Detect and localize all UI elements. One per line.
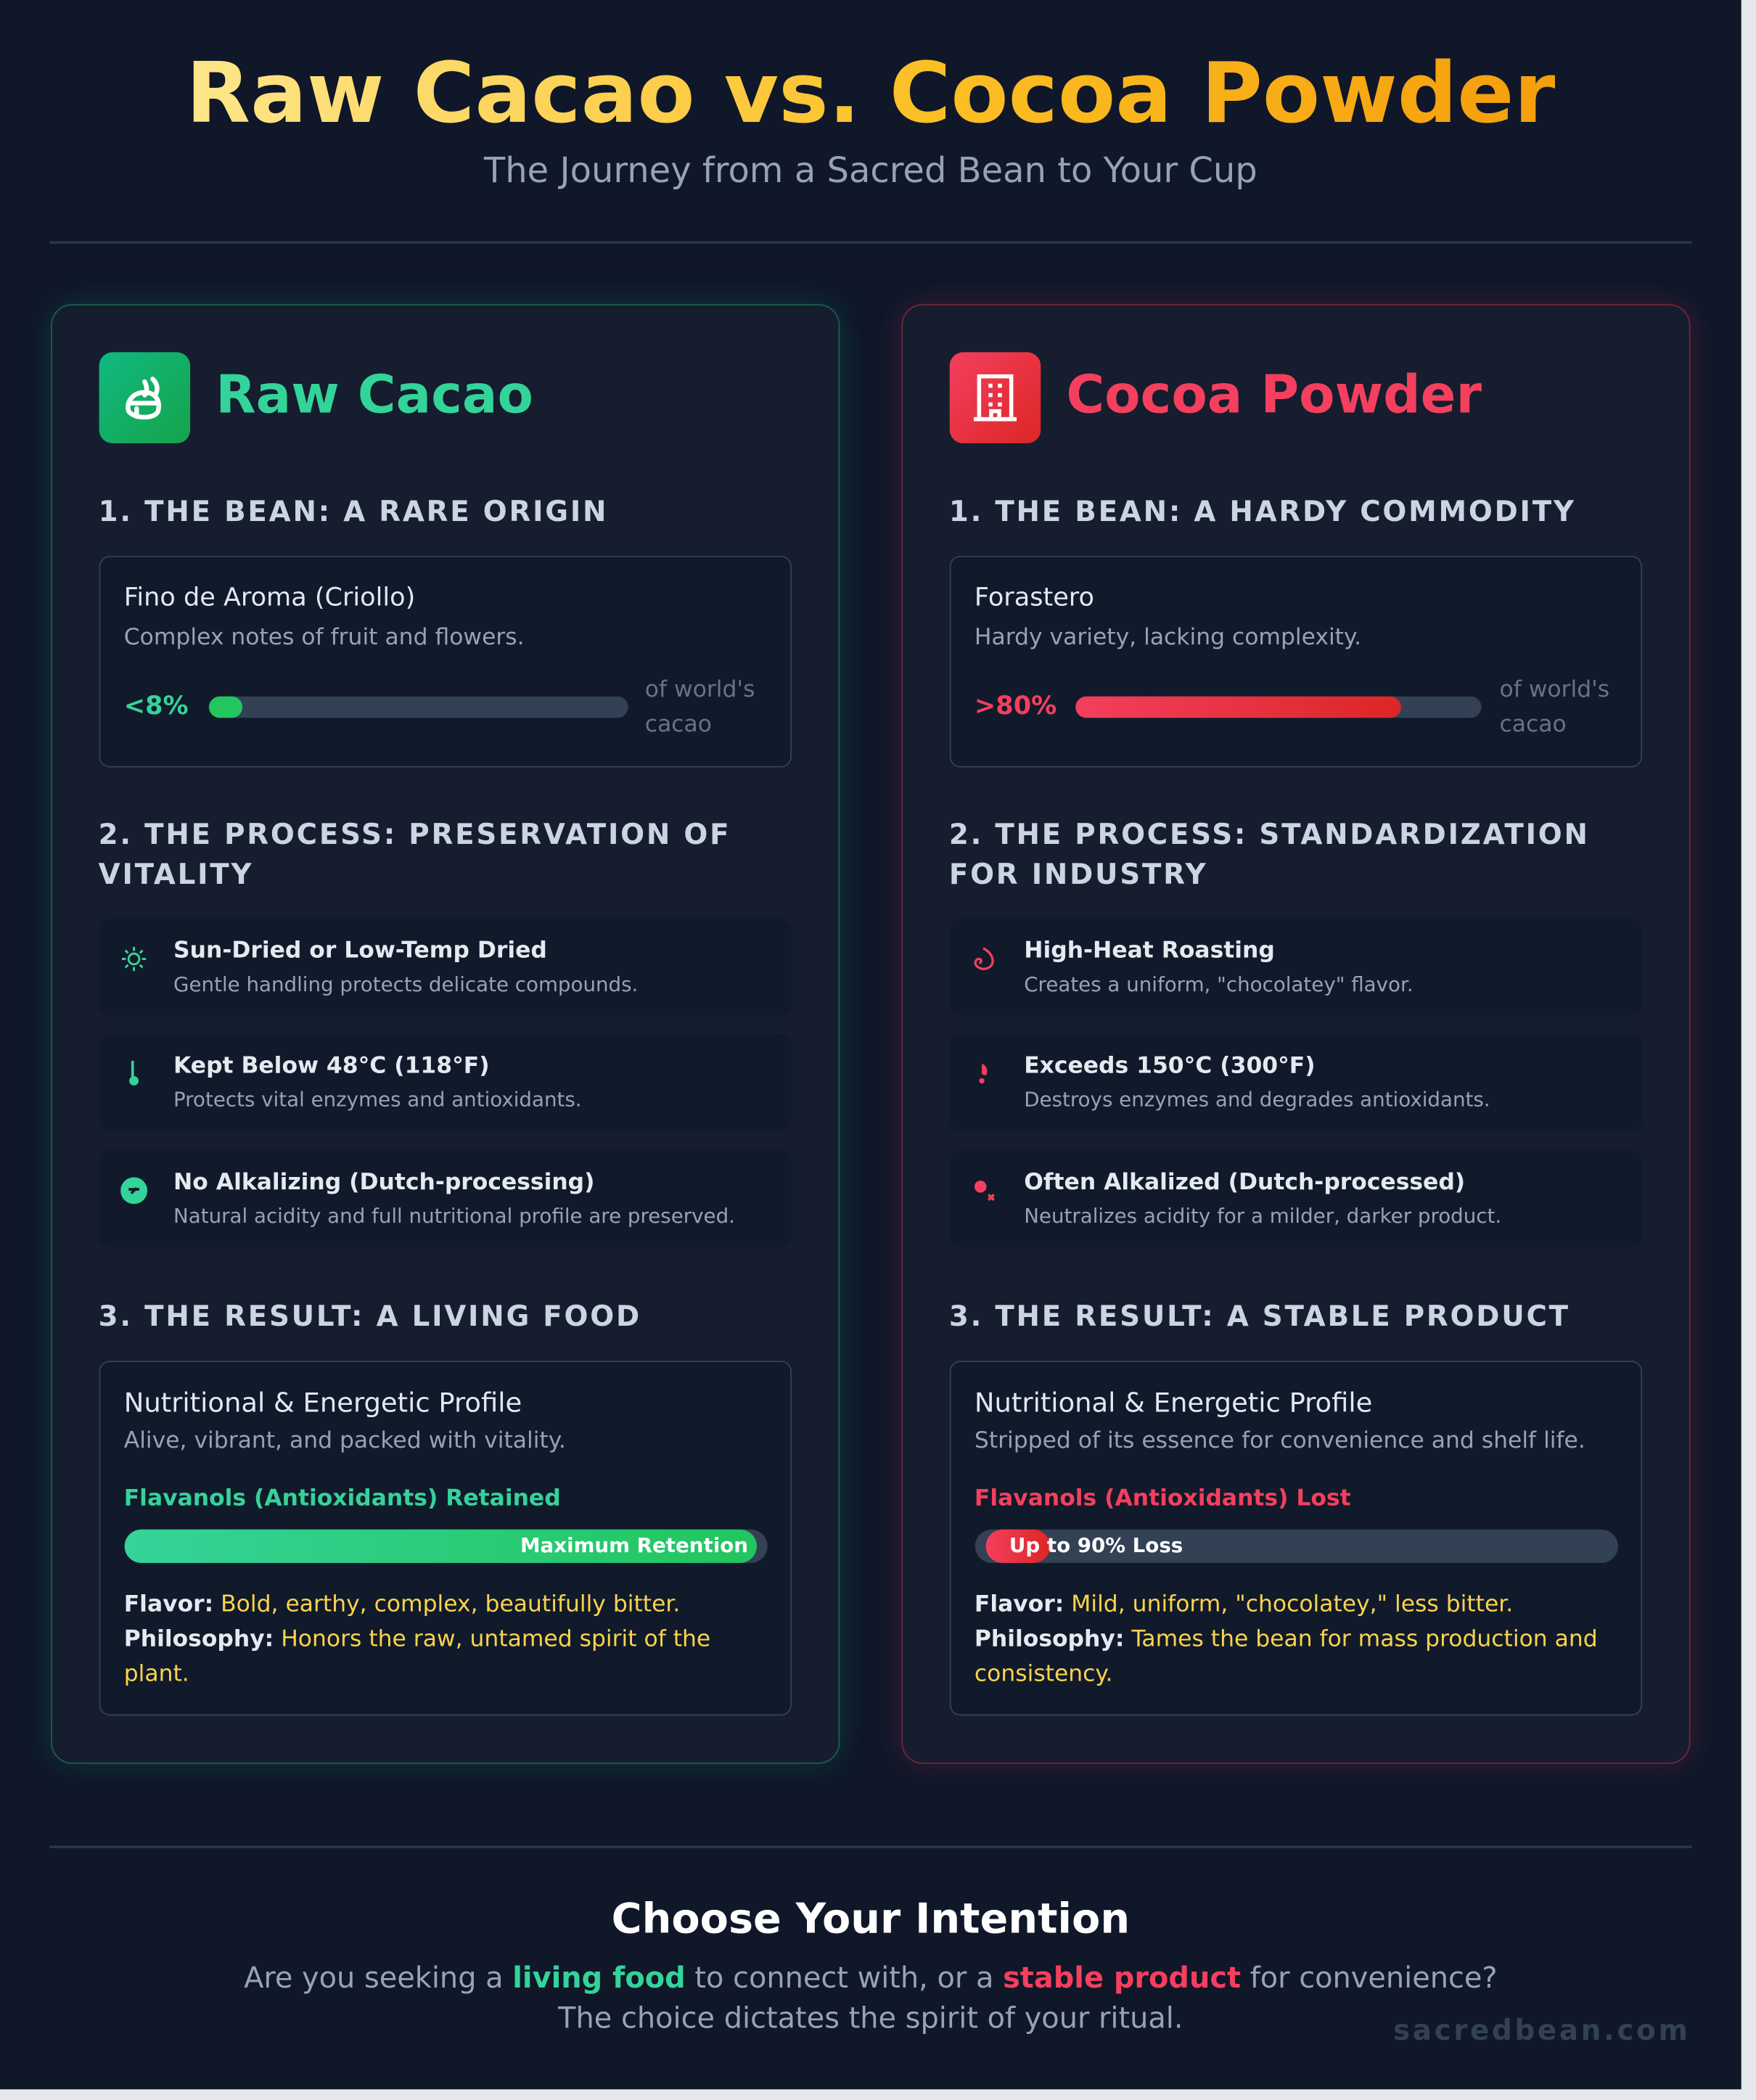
section heading 2: FOR INDUSTRY bbox=[949, 858, 1208, 890]
result card: Philosophy: Honors the raw, untamed spirit of the plant. bbox=[124, 1626, 710, 1688]
item: alkalized bbox=[949, 1150, 1641, 1247]
section heading 1: 1. THE BEAN: A HARDY COMMODITY bbox=[949, 496, 1576, 528]
bar: up to 90% loss: Up to 90% Loss bbox=[1009, 1533, 1183, 1558]
item: no alkalizing bbox=[99, 1150, 791, 1247]
bean card bbox=[99, 556, 791, 768]
footer text: Are you seeking a living food to connect with, or a stable product for convenience? bbox=[244, 1962, 1498, 1996]
item: sun dried bbox=[99, 919, 791, 1015]
footer text: The choice dictates the spirit of your ritual. bbox=[558, 2002, 1183, 2035]
bean card: cacao bbox=[645, 711, 712, 738]
section heading 3: 3. THE RESULT: A LIVING FOOD bbox=[99, 1300, 641, 1332]
bar: maximum retention: Maximum Retention bbox=[520, 1533, 748, 1558]
result card bbox=[949, 1361, 1641, 1715]
result card: Flavanols (Antioxidants) Retained bbox=[124, 1485, 561, 1512]
icon: cacao bbox=[99, 352, 190, 443]
section heading 2: 2. THE PROCESS: STANDARDIZATION bbox=[949, 819, 1590, 850]
item: sun dried: Gentle handling protects delicate compounds. bbox=[173, 972, 638, 996]
bean card: cacao bbox=[1500, 711, 1567, 738]
item: below 48C bbox=[99, 1034, 791, 1131]
item: exceeds 150C: Exceeds 150°C (300°F) bbox=[1024, 1053, 1316, 1080]
bean card: Complex notes of fruit and flowers. bbox=[124, 624, 525, 651]
bean card bbox=[949, 556, 1641, 768]
bar: >80%: >80% bbox=[975, 691, 1057, 721]
result card: Alive, vibrant, and packed with vitality. bbox=[124, 1428, 566, 1454]
item: exceeds 150C bbox=[949, 1034, 1641, 1131]
result card: Philosophy: Tames the bean for mass production and consistency. bbox=[975, 1626, 1598, 1688]
result card: Flavanols (Antioxidants) Lost bbox=[975, 1485, 1351, 1512]
subtitle: The Journey from a Sacred Bean to Your Cup bbox=[484, 152, 1257, 192]
result card: Flavor: Bold, earthy, complex, beautifully bitter. bbox=[124, 1591, 680, 1618]
item: no alkalizing: Natural acidity and full nutritional profile are preserved. bbox=[173, 1204, 735, 1229]
result card: Nutritional & Energetic Profile bbox=[124, 1386, 522, 1419]
section heading 2 bbox=[99, 819, 731, 890]
bean card: Forastero bbox=[975, 583, 1094, 612]
bar: <8%: <8% bbox=[124, 691, 189, 721]
bean card: Fino de Aroma (Criollo) bbox=[124, 583, 415, 612]
bean card: of world's bbox=[1500, 676, 1609, 703]
bar: maximum retention bbox=[124, 1530, 767, 1563]
panel: raw cacao bbox=[51, 304, 840, 1764]
bean card: of world's bbox=[645, 676, 755, 703]
section heading 3: 3. THE RESULT: A STABLE PRODUCT bbox=[949, 1300, 1570, 1332]
panel: cocoa powder bbox=[901, 304, 1691, 1764]
bar: up to 90% loss bbox=[975, 1530, 1617, 1563]
item: below 48C: Protects vital enzymes and antioxidants. bbox=[173, 1088, 582, 1112]
section heading 2 bbox=[949, 819, 1590, 890]
brand: sacredbean.com bbox=[1393, 2014, 1691, 2046]
result card: Flavor: Mild, uniform, "chocolatey," less bitter. bbox=[975, 1591, 1513, 1618]
item: high heat roasting bbox=[949, 919, 1641, 1015]
result card: Nutritional & Energetic Profile bbox=[975, 1386, 1372, 1419]
result card bbox=[99, 1361, 791, 1715]
item: alkalized: Often Alkalized (Dutch-processed) bbox=[1024, 1169, 1465, 1196]
heading: raw cacao: Raw Cacao bbox=[216, 366, 533, 426]
item: exceeds 150C: Destroys enzymes and degrades antioxidants. bbox=[1024, 1088, 1490, 1112]
section heading 2: VITALITY bbox=[99, 858, 253, 890]
item: high heat roasting: Creates a uniform, "chocolatey" flavor. bbox=[1024, 972, 1414, 996]
item: sun dried: Sun-Dried or Low-Temp Dried bbox=[173, 938, 547, 964]
item: high heat roasting: High-Heat Roasting bbox=[1024, 938, 1275, 964]
item: no alkalizing: No Alkalizing (Dutch-processing) bbox=[173, 1169, 595, 1196]
heading: cocoa powder: Cocoa Powder bbox=[1066, 366, 1482, 426]
footer heading: Choose Your Intention bbox=[612, 1895, 1130, 1943]
result card: Stripped of its essence for convenience and shelf life. bbox=[975, 1428, 1585, 1454]
footer text bbox=[244, 1962, 1498, 2035]
item: alkalized: Neutralizes acidity for a milder, darker product. bbox=[1024, 1204, 1501, 1229]
section heading 1: 1. THE BEAN: A RARE ORIGIN bbox=[99, 496, 608, 528]
icon: factory bbox=[950, 352, 1041, 443]
bean card: Hardy variety, lacking complexity. bbox=[975, 624, 1361, 651]
section heading 2: 2. THE PROCESS: PRESERVATION OF bbox=[99, 819, 731, 850]
item: below 48C: Kept Below 48°C (118°F) bbox=[173, 1053, 490, 1080]
title: Raw Cacao vs. Cocoa Powder bbox=[186, 44, 1555, 142]
